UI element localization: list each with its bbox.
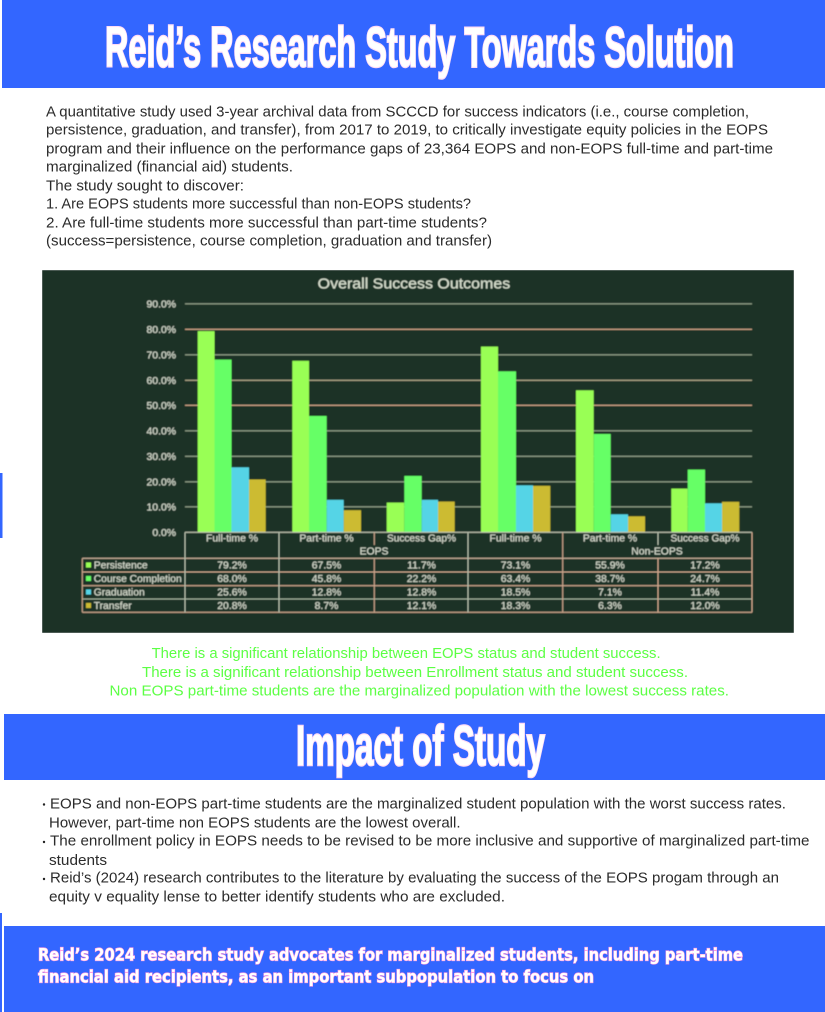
- legend: graduation row: [86, 588, 719, 598]
- y axis labels: 40.0%: [147, 426, 176, 438]
- impact bullet list: EOPS and non-EOPS part-time students are the marginalized student population with the worst success rates.: [50, 796, 786, 812]
- legend: graduation row: 25.6%: [217, 588, 247, 598]
- y axis labels: 0.0%: [152, 528, 176, 539]
- y axis labels: 60.0%: [147, 376, 176, 387]
- legend: course completion row: [86, 574, 720, 585]
- chart title: Overall Success Outcomes: [318, 276, 510, 292]
- legend: persistence row: 67.5%: [312, 560, 341, 572]
- impact banner: [4, 714, 825, 780]
- legend: graduation row: Graduation: [94, 588, 145, 598]
- intro text block: [46, 104, 773, 250]
- bars: non-EOPS part-time: [576, 390, 645, 532]
- intro text block: 1. Are EOPS students more successful than non-EOPS students?: [46, 196, 471, 212]
- callout text: financial aid recipients, as an important subpopulation to focus on: [38, 968, 594, 987]
- bottom callout banner: [4, 926, 825, 1012]
- impact bullet list: equity v equality lense to better identify students who are excluded.: [49, 890, 505, 906]
- impact heading: Impact of Study: [296, 714, 545, 778]
- impact bullet list: students: [49, 853, 107, 869]
- intro text block: The study sought to discover:: [46, 178, 244, 194]
- y axis labels: 90.0%: [147, 300, 176, 310]
- y axis labels: 30.0%: [147, 452, 176, 463]
- bars: non-EOPS full-time: [481, 347, 550, 532]
- bars: EOPS part-time: [292, 361, 361, 532]
- legend: persistence row: [86, 560, 720, 572]
- legend: course completion row: Course Completion: [94, 574, 182, 585]
- y axis labels: 80.0%: [147, 325, 176, 336]
- left edge mark bottom: [0, 913, 2, 1012]
- legend: transfer row: 8.7%: [315, 601, 338, 612]
- bars: non-EOPS success gap: [671, 470, 739, 532]
- legend: course completion row: 22.2%: [407, 574, 436, 585]
- impact bullet list: [43, 796, 810, 906]
- data table: Success Gap%: [387, 534, 456, 545]
- legend: course completion row: 38.7%: [595, 574, 625, 585]
- intro text block: marginalized (financial aid) students.: [46, 160, 293, 176]
- legend: course completion row: 63.4%: [501, 574, 530, 585]
- data table: Non-EOPS: [631, 546, 683, 558]
- data table: Part-time %: [299, 534, 354, 545]
- intro text block: program and their influence on the performance gaps of 23,364 EOPS and non-EOPS full-time and part-time: [46, 141, 773, 157]
- legend: transfer row: 18.3%: [501, 601, 530, 612]
- callout text: [38, 946, 743, 987]
- impact bullet list: However, part-time non EOPS students are the lowest overall.: [49, 816, 460, 832]
- legend: transfer row: 12.0%: [690, 601, 720, 612]
- legend: graduation row: 12.8%: [312, 588, 341, 598]
- bars: EOPS success gap: [387, 476, 455, 532]
- legend: transfer row: Transfer: [94, 601, 132, 612]
- legend: persistence row: 17.2%: [690, 560, 720, 572]
- legend: course completion row: 24.7%: [690, 574, 720, 585]
- legend: graduation row: 11.4%: [691, 588, 719, 598]
- y axis labels: 20.0%: [147, 478, 176, 488]
- y axis labels: 70.0%: [147, 350, 176, 362]
- top title banner: [2, 0, 825, 88]
- y axis labels: 10.0%: [147, 502, 176, 514]
- data table: Part-time %: [583, 534, 637, 545]
- callout text: Reid’s 2024 research study advocates for marginalized students, including part-time: [38, 946, 743, 965]
- legend: graduation row: 7.1%: [598, 588, 622, 598]
- legend: persistence row: Persistence: [94, 560, 148, 572]
- intro text block: A quantitative study used 3-year archival data from SCCCD for success indicators (i.e., course completion,: [46, 104, 749, 120]
- legend: persistence row: 79.2%: [217, 560, 247, 572]
- left edge mark: [0, 473, 2, 538]
- legend: persistence row: 73.1%: [501, 560, 530, 572]
- legend: transfer row: [86, 601, 720, 612]
- key findings text: Non EOPS part-time students are the marginalized population with the lowest success rates.: [110, 684, 729, 700]
- y axis labels: 50.0%: [147, 401, 176, 412]
- legend: graduation row: 18.5%: [501, 588, 530, 598]
- key findings text: There is a significant relationship between EOPS status and student success.: [152, 646, 661, 662]
- intro text block: 2. Are full-time students more successful than part-time students?: [46, 215, 487, 231]
- legend: course completion row: 45.8%: [312, 574, 341, 585]
- data table: Success Gap%: [670, 534, 740, 545]
- key findings text: There is a significant relationship between Enrollment status and student success.: [142, 665, 688, 681]
- data table: Full-time %: [206, 534, 258, 545]
- data table: Full-time %: [490, 534, 541, 545]
- legend: transfer row: 20.8%: [217, 601, 247, 612]
- intro text block: (success=persistence, course completion, graduation and transfer): [46, 234, 492, 250]
- impact bullet list: Reid’s (2024) research contributes to the literature by evaluating the success of the EOPS progam through an: [50, 871, 779, 887]
- legend: course completion row: 68.0%: [217, 574, 247, 585]
- panel: overall success outcomes chart: [42, 270, 794, 633]
- legend: persistence row: 11.7%: [407, 560, 436, 572]
- bars: EOPS full-time: [198, 331, 266, 532]
- key findings text: [110, 646, 729, 700]
- legend: transfer row: 12.1%: [407, 601, 436, 612]
- data table: EOPS: [360, 546, 389, 558]
- legend: graduation row: 12.8%: [407, 588, 436, 598]
- data table: [82, 532, 752, 612]
- y axis labels: [147, 300, 176, 539]
- legend: persistence row: 55.9%: [595, 560, 625, 572]
- intro text block: persistence, graduation, and transfer), from 2017 to 2019, to critically investigate equity policies in the EOPS: [46, 123, 768, 139]
- impact bullet list: The enrollment policy in EOPS needs to be revised to be more inclusive and supportive of marginalized part-time: [50, 834, 810, 850]
- legend: transfer row: 6.3%: [598, 601, 622, 612]
